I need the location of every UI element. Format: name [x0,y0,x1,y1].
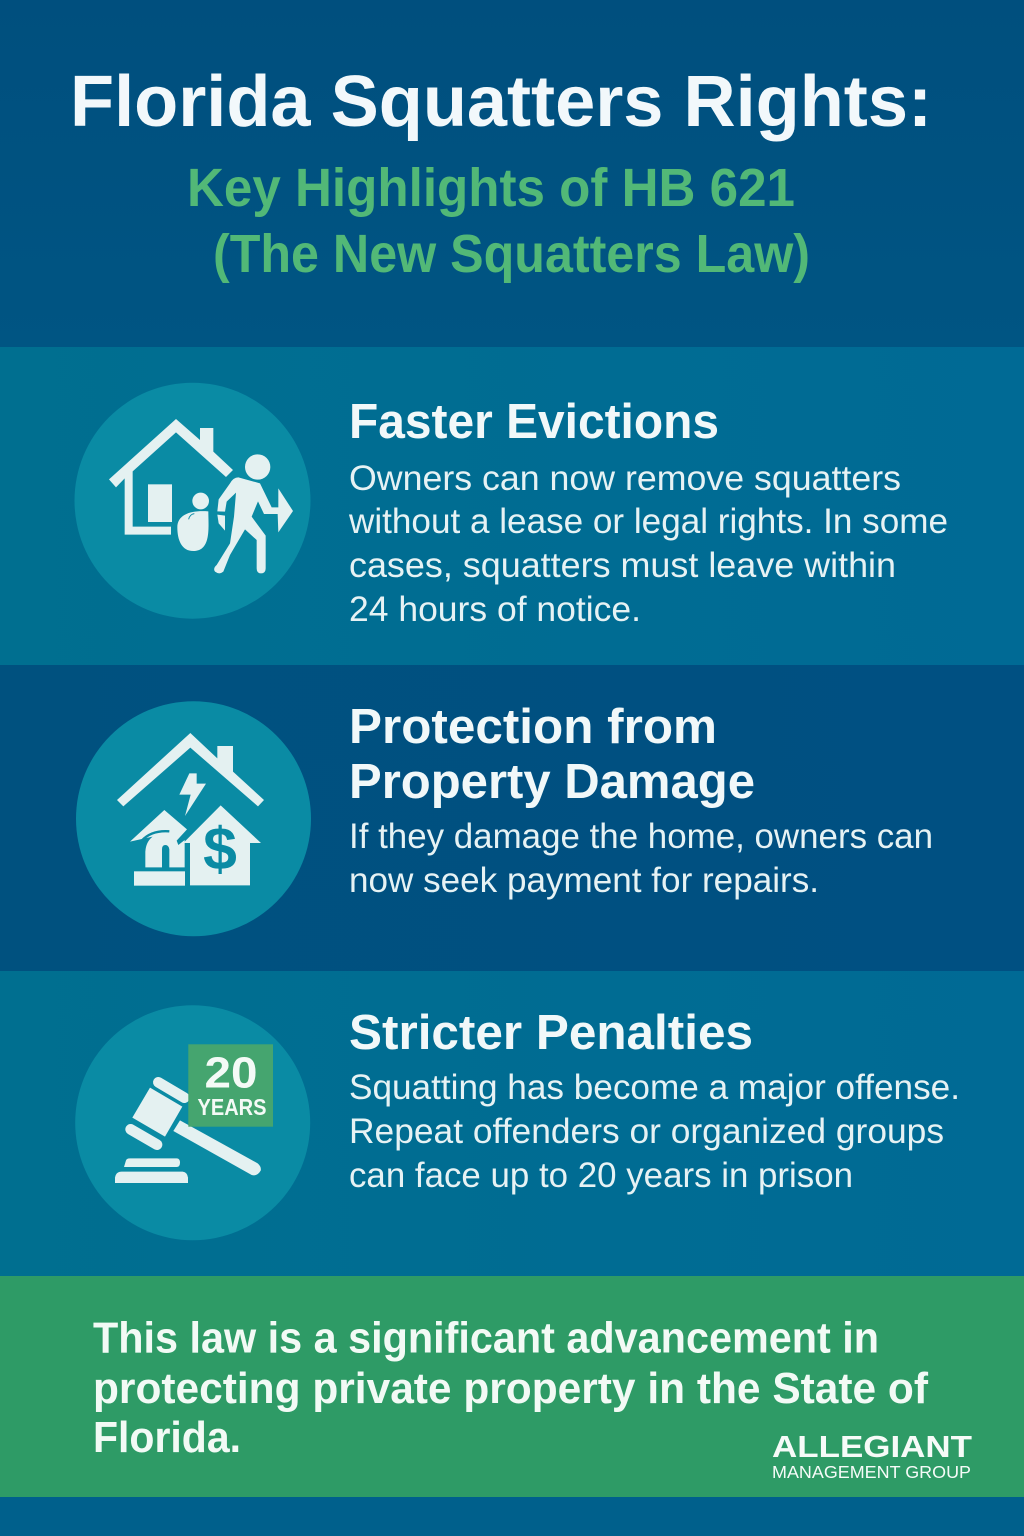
panel: protection from property damage [0,665,1024,971]
heading [349,700,755,809]
badge: 20 years [188,1044,273,1127]
body text [348,459,948,629]
body text: cases, squatters must leave within [349,546,896,585]
heading: Faster Evictions [349,395,719,449]
heading: Stricter Penalties [349,1006,753,1060]
logo: allegiant management group: ALLEGIANT [772,1429,972,1464]
conclusion text: Florida. [93,1413,241,1462]
body text: Owners can now remove squatters [349,459,901,498]
subtitle: (The New Squatters Law) [213,224,810,284]
icon: house and person leaving [74,383,310,619]
logo: allegiant management group: MANAGEMENT GROUP [772,1462,971,1482]
badge: 20 years: YEARS [198,1094,266,1120]
body text: If they damage the home, owners can [349,817,933,856]
logo: allegiant management group [772,1429,972,1482]
body text: 24 hours of notice. [349,590,641,629]
body text: Squatting has become a major offense. [349,1068,960,1107]
header panel [0,0,1024,347]
body text [349,817,933,900]
subtitle [187,158,810,284]
subtitle: Key Highlights of HB 621 [187,158,795,218]
body text [349,1068,960,1195]
heading: Protection from [349,700,717,754]
badge: 20 years: 20 [204,1048,258,1098]
body text: now seek payment for repairs. [349,861,819,900]
panel: faster evictions [0,347,1024,665]
title: Florida Squatters Rights: [70,62,932,142]
bottom band [0,1497,1024,1536]
icon: damaged house and dollar [76,701,311,936]
body text: can face up to 20 years in prison [349,1156,853,1195]
conclusion text: protecting private property in the State of [93,1364,928,1413]
conclusion text [93,1314,928,1462]
body text: Repeat offenders or organized groups [349,1112,944,1151]
panel: stricter penalties [0,971,1024,1276]
heading: Property Damage [349,755,755,809]
body text: without a lease or legal rights. In some [348,502,948,541]
icon: gavel with 20 years badge [75,1005,310,1240]
conclusion text: This law is a significant advancement in [93,1314,879,1362]
panel: conclusion banner [0,1276,1024,1497]
icon: damaged house and dollar: $ [203,814,237,882]
